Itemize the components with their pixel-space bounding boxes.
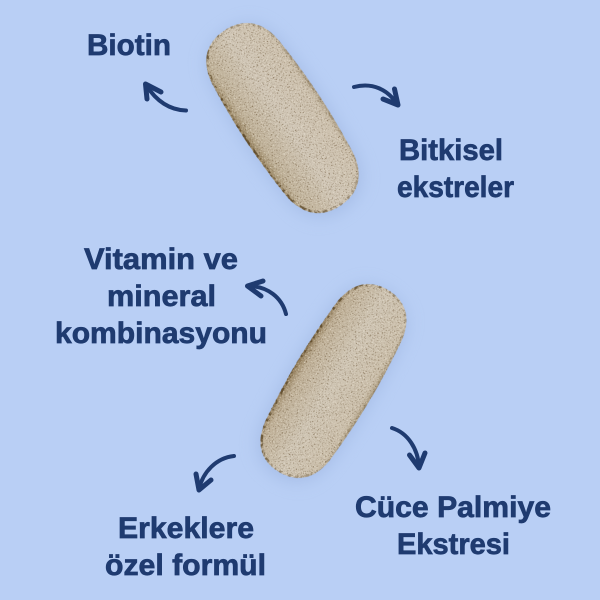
label: Bitkisel ekstreler: Bitkisel xyxy=(399,134,503,167)
label: Cüce Palmiye Ekstresi: Ekstresi xyxy=(397,528,510,561)
label: Erkeklere özel formül: Erkeklere xyxy=(118,512,254,545)
label: Bitkisel ekstreler: ekstreler xyxy=(397,171,514,204)
label: Cüce Palmiye Ekstresi: Cüce Palmiye xyxy=(355,491,551,524)
arrow: to Cüce Palmiye Ekstresi xyxy=(392,428,425,468)
arrow: to Biotin xyxy=(146,84,186,110)
label: Erkeklere özel formül: özel formül xyxy=(105,549,266,582)
label: Biotin: Biotin xyxy=(87,29,171,62)
arrow: to Vitamin ve mineral kombinasyonu xyxy=(248,281,286,314)
arrow: to Bitkisel ekstreler xyxy=(354,86,398,105)
label: Vitamin ve mineral kombinasyonu: Vitamin ve xyxy=(84,243,238,276)
tablet: upper pill xyxy=(189,7,378,232)
label: Vitamin ve mineral kombinasyonu: kombinasyonu xyxy=(55,317,267,350)
label: Erkeklere özel formül xyxy=(105,512,266,582)
arrow: to Erkeklere özel formül xyxy=(196,456,234,490)
label: Cüce Palmiye Ekstresi xyxy=(355,491,551,561)
tablet: lower pill xyxy=(242,269,423,496)
label: Bitkisel ekstreler xyxy=(397,134,514,204)
label: Vitamin ve mineral kombinasyonu xyxy=(55,243,267,350)
label: Vitamin ve mineral kombinasyonu: mineral xyxy=(107,280,216,313)
